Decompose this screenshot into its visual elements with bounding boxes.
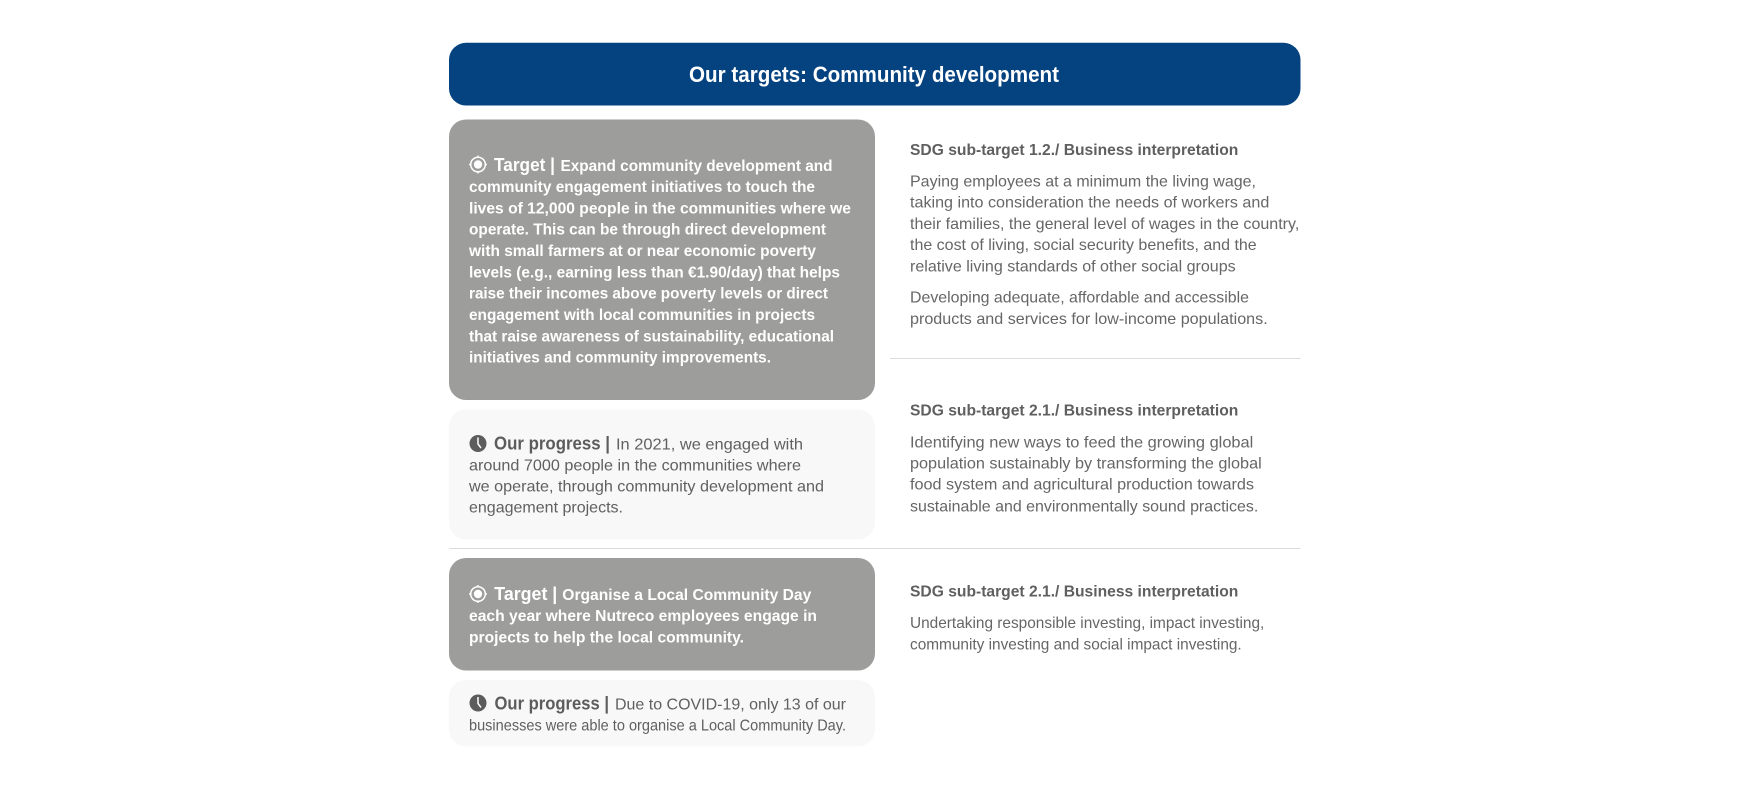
panel: target 1: engagement with local communities in projects <box>469 307 815 324</box>
icon: target 1 <box>469 156 487 174</box>
panel: progress 1: engagement projects. <box>469 500 623 517</box>
text block: SDG 1.2 <box>910 142 1299 328</box>
panel: target 1: community engagement initiatives to touch the <box>469 179 815 196</box>
text block: SDG 2.1 first: Identifying new ways to feed the growing global <box>910 435 1253 452</box>
text block: SDG 1.2: taking into consideration the needs of workers and <box>910 195 1269 212</box>
icon: clock 2 <box>470 694 486 712</box>
panel: progress 2: Our progress | <box>494 693 609 713</box>
panel: progress 2 <box>449 680 875 746</box>
panel: progress 1: In 2021, we engaged with <box>616 436 803 453</box>
text block: SDG 2.1 first: sustainable and environmentally sound practices. <box>910 498 1258 515</box>
panel: progress 2: businesses were able to organise a Local Community Day. <box>469 718 846 735</box>
text block: SDG 2.1 second: Undertaking responsible investing, impact investing, <box>910 615 1264 632</box>
panel: target 1: levels (e.g., earning less than €1.90/day) that helps <box>469 264 840 281</box>
panel: progress 1 <box>449 410 875 540</box>
panel: target 2: Organise a Local Community Day <box>562 587 812 604</box>
text block: SDG 2.1 first: population sustainably by transforming the global <box>910 456 1262 473</box>
text block: SDG 2.1 second: SDG sub-target 2.1./ Business interpretation <box>910 584 1238 601</box>
panel: progress 1: Our progress | <box>494 433 610 453</box>
panel: target 1: Target | <box>494 155 555 175</box>
text block: SDG 2.1 first: SDG sub-target 2.1./ Business interpretation <box>910 403 1238 420</box>
panel: target 1: with small farmers at or near economic poverty <box>468 243 816 260</box>
text block: SDG 1.2: Developing adequate, affordable and accessible <box>910 290 1249 307</box>
panel: progress 2: Due to COVID-19, only 13 of our <box>615 696 847 713</box>
title banner <box>449 43 1300 106</box>
panel: progress 1: we operate, through community development and <box>468 479 824 496</box>
text block: SDG 2.1 first <box>910 403 1262 515</box>
panel: target 2 <box>449 558 875 670</box>
panel: target 1: lives of 12,000 people in the communities where we <box>469 201 851 218</box>
text block: SDG 2.1 second <box>910 584 1264 653</box>
title banner: Our targets: Community development <box>689 62 1060 87</box>
divider: right column <box>890 358 1300 359</box>
icon: target 2 <box>469 585 487 603</box>
text block: SDG 1.2: their families, the general level of wages in the country, <box>910 216 1299 233</box>
text block: SDG 1.2: products and services for low-income populations. <box>910 311 1268 328</box>
panel: target 2: projects to help the local community. <box>469 630 744 647</box>
text block: SDG 1.2: relative living standards of other social groups <box>910 258 1236 275</box>
panel: target 1 <box>449 120 875 400</box>
panel: target 1: raise their incomes above poverty levels or direct <box>469 286 828 303</box>
panel: target 1: operate. This can be through direct development <box>469 222 826 239</box>
panel: target 1: Expand community development and <box>560 158 832 175</box>
panel: target 1: that raise awareness of sustainability, educational <box>469 328 834 345</box>
icon: clock 1 <box>470 435 486 452</box>
panel: target 2: Target | <box>494 584 557 604</box>
panel: target 2: each year where Nutreco employees engage in <box>469 608 817 625</box>
text block: SDG 2.1 second: community investing and social impact investing. <box>910 636 1242 653</box>
text block: SDG 2.1 first: food system and agricultural production towards <box>910 477 1254 494</box>
divider: full width <box>449 548 1300 549</box>
panel: progress 1: around 7000 people in the communities where <box>469 457 801 474</box>
text block: SDG 1.2: Paying employees at a minimum the living wage, <box>910 174 1256 191</box>
panel: target 1: initiatives and community improvements. <box>469 350 771 367</box>
text block: SDG 1.2: SDG sub-target 1.2./ Business interpretation <box>910 142 1238 159</box>
text block: SDG 1.2: the cost of living, social security benefits, and the <box>910 237 1257 254</box>
